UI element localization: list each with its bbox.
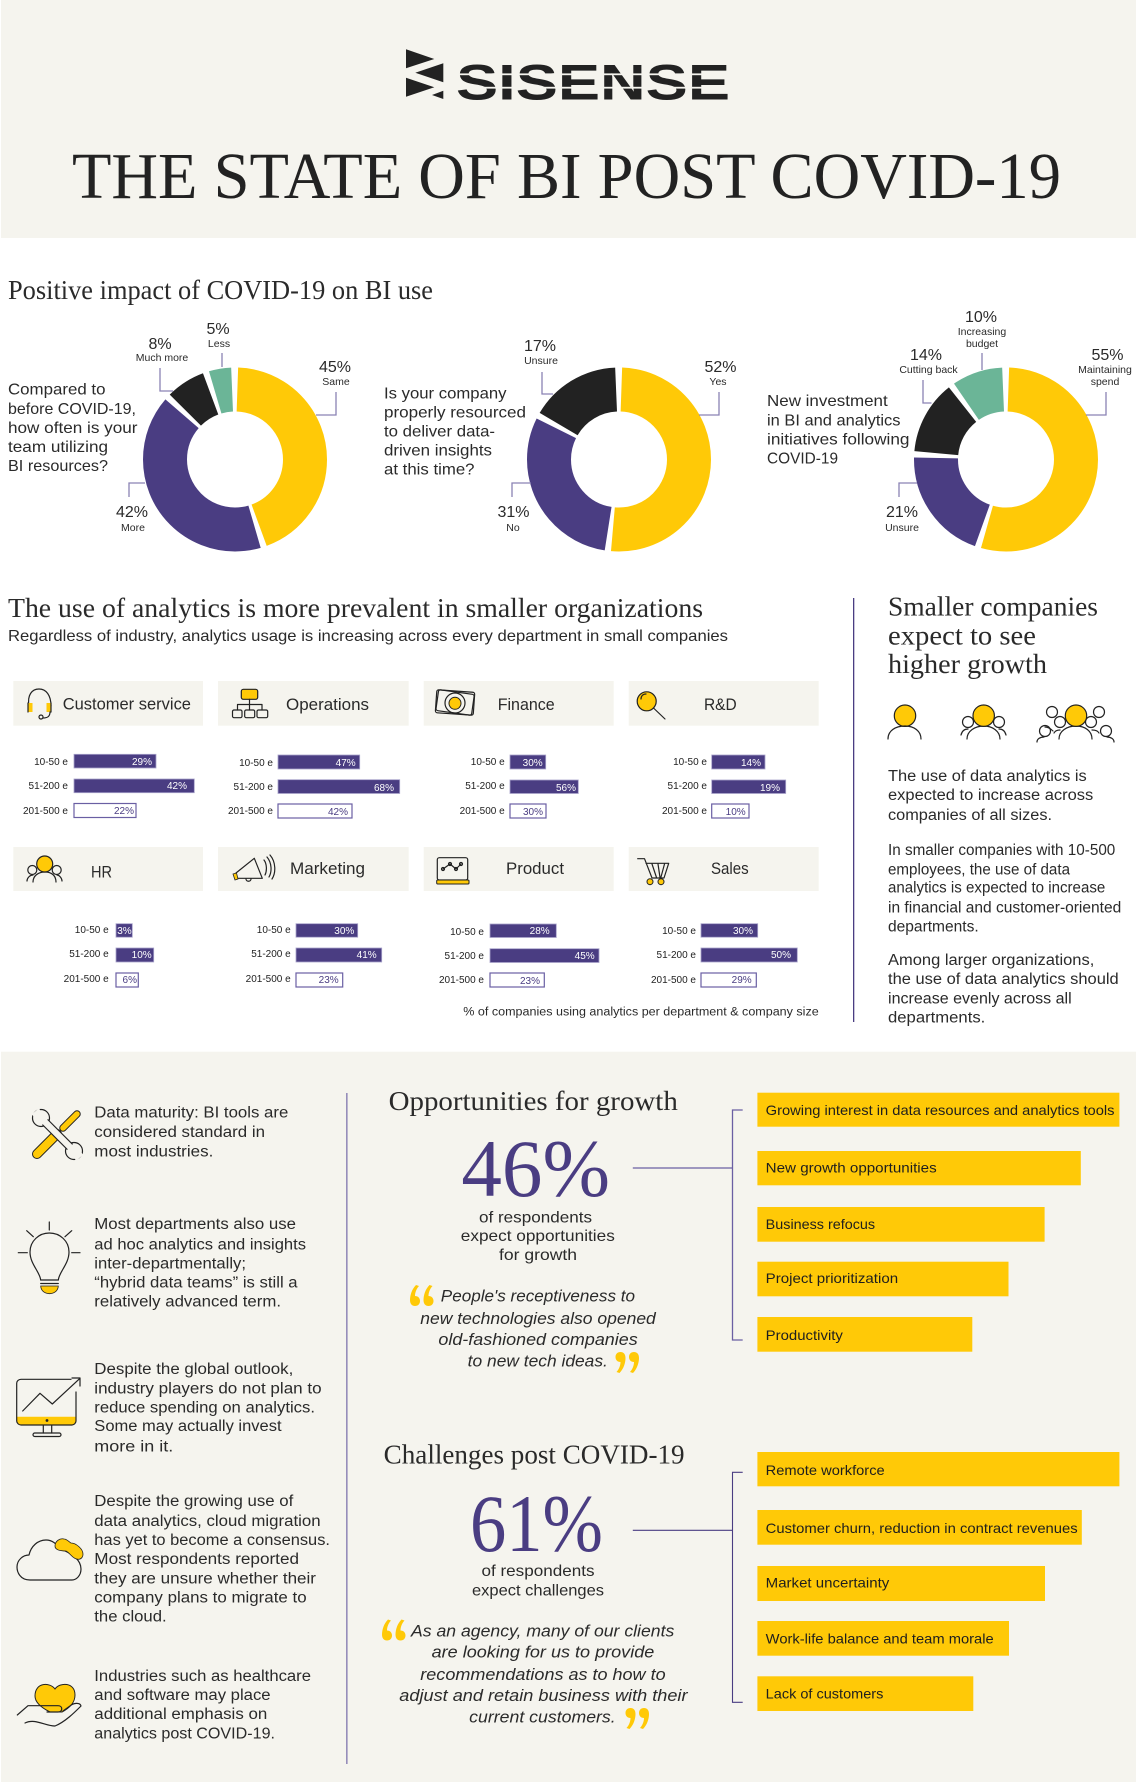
item: cloud migration: Despite the growing use of <box>94 1493 294 1510</box>
donut chart 1: More <box>121 522 145 534</box>
bar chart: marketing <box>246 924 382 987</box>
icon: cloud <box>17 1539 83 1580</box>
bar chart: product <box>439 924 599 987</box>
panel: donut 3 question: COVID-19 <box>767 450 838 468</box>
panel: smaller companies <box>888 592 1121 1027</box>
donut chart 2 <box>497 338 737 534</box>
bar chart: customer service <box>23 754 194 818</box>
bar chart: finance: 51-200 e <box>465 781 505 792</box>
panel: donut 1 question <box>8 382 138 475</box>
icon: laptop chart <box>437 858 469 884</box>
panel: donut 3 question: initiatives following <box>767 432 910 448</box>
donut chart 1: 8% <box>148 336 172 353</box>
bar chart: HR: 201-500 e <box>64 974 109 985</box>
icon: small team <box>961 705 1006 739</box>
bar chart: operations: 42% <box>328 807 348 818</box>
quote: current customers. <box>469 1708 616 1727</box>
bar chart: finance: 10-50 e <box>471 757 505 768</box>
title: THE STATE OF BI POST COVID-19 <box>72 140 1061 213</box>
item: healthcare and software <box>17 1668 311 1742</box>
panel: donut 3 question: New investment <box>767 393 888 410</box>
text: all sizes: companies of all sizes. <box>888 807 1052 824</box>
item: spending: industry players do not plan to <box>94 1380 322 1397</box>
panel: opportunities for growth <box>389 1086 1119 1373</box>
bar chart: operations: 68% <box>374 783 394 794</box>
item: ad hoc analytics: inter-departmentally; <box>94 1255 246 1272</box>
panel: HR <box>13 847 203 891</box>
panel: donut 2 question: at this time? <box>384 462 475 478</box>
item: spending: reduce spending on analytics. <box>94 1399 315 1416</box>
quote <box>410 1285 656 1373</box>
panel: challenges post COVID-19 <box>382 1439 1119 1729</box>
text: all sizes: expected to increase across <box>888 787 1094 804</box>
bar chart: customer service: 51-200 e <box>29 781 68 792</box>
connector bracket <box>633 1472 743 1702</box>
panel: donut 3 question: in BI and analytics <box>767 412 900 430</box>
panel: HR: HR <box>91 863 112 881</box>
icon: tools <box>32 1108 83 1161</box>
text: smaller companies: analytics is expected to increase <box>888 880 1105 897</box>
bar chart: product: 201-500 e <box>439 975 484 986</box>
item: healthcare and software: Industries such as healthcare <box>94 1668 311 1685</box>
donut chart 1: Less <box>208 338 230 350</box>
bar chart: R&D: 19% <box>760 783 780 794</box>
bar chart: finance: 56% <box>556 783 576 794</box>
logo: Sisense <box>406 49 734 110</box>
donut chart 2: No <box>506 522 520 534</box>
item: ad hoc analytics: Most departments also use <box>94 1216 296 1233</box>
item: data maturity <box>32 1104 288 1161</box>
ranked bars: opportunities <box>757 1093 1119 1352</box>
bar chart: customer service: 10-50 e <box>34 757 68 768</box>
icon: heart in hand <box>17 1684 81 1726</box>
panel: donut 1 question: before COVID-19, <box>8 401 136 418</box>
bar chart: marketing: 41% <box>357 950 377 961</box>
heading: smaller companies <box>888 592 1098 679</box>
bar chart: sales: 29% <box>732 975 752 986</box>
panel: donut 1 question: team utilizing <box>8 439 108 456</box>
lower panel background <box>1 1052 1136 1782</box>
icon: megaphone <box>233 855 275 881</box>
bar chart: HR: 10-50 e <box>75 925 109 936</box>
item: cloud migration <box>17 1493 330 1626</box>
icon: headset <box>28 689 51 719</box>
ranked bars: opportunities: Business refocus <box>766 1216 875 1232</box>
panel: R&D: R&D <box>704 696 737 714</box>
panel: finance: Finance <box>498 696 555 714</box>
panel: donut 1 question: how often is your <box>8 420 138 437</box>
quote: As an agency, many of our clients <box>410 1622 675 1641</box>
bar chart: operations: 51-200 e <box>234 782 273 793</box>
item: cloud migration: data analytics, cloud migration <box>94 1513 321 1530</box>
text: all sizes: The use of data analytics is <box>888 768 1087 785</box>
icon: light bulb <box>18 1222 80 1294</box>
panel: donut 2 question: to deliver data- <box>384 424 495 440</box>
panel: marketing <box>218 847 409 891</box>
panel: donut 2 question <box>384 385 526 478</box>
panel: operations <box>218 681 409 726</box>
item: cloud migration: the cloud. <box>94 1609 167 1626</box>
stat caption: for growth <box>499 1247 577 1264</box>
ranked bars: challenges: Remote workforce <box>766 1462 885 1478</box>
item: data maturity: considered standard in <box>94 1124 265 1141</box>
donut chart 3 <box>885 309 1132 534</box>
ranked bars: challenges: Work-life balance and team morale <box>766 1630 994 1646</box>
footnote: % of companies using analytics per department & company size <box>463 1007 819 1019</box>
bar chart: finance: 30% <box>523 807 543 818</box>
panel: customer service <box>13 681 203 726</box>
donut chart 1: 42% <box>116 504 148 521</box>
bar chart: HR: 6% <box>123 975 137 986</box>
bar chart: sales: 10-50 e <box>662 926 696 937</box>
panel: donut 2 question: Is your company <box>384 385 506 402</box>
ranked bars: opportunities: Productivity <box>766 1327 843 1343</box>
header panel <box>1 0 1136 238</box>
item: spending: Some may actually invest <box>94 1418 282 1435</box>
donut chart 3: Increasing <box>958 326 1006 338</box>
item: ad hoc analytics: “hybrid data teams” is still a <box>94 1274 298 1291</box>
bar chart: R&D: 201-500 e <box>662 806 707 817</box>
donut chart 3: Unsure <box>885 522 919 534</box>
stat: 46%: 46% <box>461 1123 610 1214</box>
donut chart 2: 31% <box>497 504 530 521</box>
bar chart: R&D <box>662 755 786 818</box>
quote: adjust and retain business with their <box>399 1686 689 1705</box>
item: spending: more in it. <box>94 1439 173 1456</box>
quote <box>382 1620 689 1729</box>
panel: sales <box>629 847 819 891</box>
donut chart 3: 21% <box>886 504 918 521</box>
stat caption <box>461 1209 615 1264</box>
item: ad hoc analytics <box>18 1216 306 1311</box>
ranked bars: opportunities: New growth opportunities <box>766 1160 937 1176</box>
icon: magnifier <box>637 692 665 719</box>
heading: opportunities: Opportunities for growth <box>389 1086 678 1116</box>
text: smaller companies: in financial and customer-oriented <box>888 900 1121 917</box>
bar chart: marketing: 51-200 e <box>251 949 291 960</box>
heading: smaller companies: Smaller companies <box>888 592 1098 622</box>
text: all sizes <box>888 768 1094 824</box>
text: larger organizations: Among larger organizations, <box>888 952 1094 969</box>
panel: donut 2 question: properly resourced <box>384 404 526 422</box>
bar chart: marketing: 30% <box>334 926 354 937</box>
panel: product <box>424 847 614 891</box>
quote: old-fashioned companies <box>438 1330 638 1349</box>
bar chart: operations <box>228 755 400 818</box>
bar chart: sales: 51-200 e <box>657 950 696 961</box>
panel: donut 1 question: Compared to <box>8 382 106 398</box>
panel: donut 3 question <box>767 393 910 468</box>
heading: positive impact: Positive impact of COVID-19 on BI use <box>8 275 433 305</box>
item: data maturity: Data maturity: BI tools are <box>94 1104 288 1121</box>
donut chart 1 <box>116 321 351 534</box>
bar chart: customer service: 42% <box>167 781 187 792</box>
bar chart: HR <box>64 924 154 987</box>
item: cloud migration: has yet to become a consensus. <box>94 1532 330 1549</box>
bar chart: marketing: 23% <box>319 975 339 986</box>
ranked bars: opportunities: Project prioritization <box>766 1270 898 1286</box>
item: cloud migration: they are unsure whether their <box>94 1570 316 1587</box>
quote: recommendations as to how to <box>420 1665 666 1684</box>
item: healthcare and software: analytics post COVID-19. <box>94 1725 275 1742</box>
item: spending: Despite the global outlook, <box>94 1361 293 1378</box>
donut chart 1: 45% <box>319 359 351 376</box>
icon: banknotes <box>435 690 475 715</box>
bar chart: operations: 10-50 e <box>239 758 273 769</box>
bar chart: customer service: 29% <box>132 757 152 768</box>
icon: large team <box>1037 705 1114 742</box>
text: smaller companies: In smaller companies with 10-500 <box>888 842 1116 859</box>
ranked bars: challenges: Lack of customers <box>766 1685 883 1701</box>
bar chart: HR: 3% <box>117 926 132 937</box>
connector bracket <box>633 1110 743 1340</box>
item: cloud migration: company plans to migrate to <box>94 1589 307 1606</box>
donut chart 2: 52% <box>704 359 737 376</box>
bar chart: product: 45% <box>575 951 595 962</box>
item: ad hoc analytics: relatively advanced term. <box>94 1294 281 1311</box>
bar chart: R&D: 10% <box>726 807 746 818</box>
text: smaller companies: employees, the use of data <box>888 861 1070 878</box>
stat caption <box>472 1563 604 1600</box>
quote: are looking for us to provide <box>432 1643 654 1662</box>
panel: R&D <box>629 681 819 726</box>
ranked bars: challenges: Customer churn, reduction in contract revenues <box>766 1520 1078 1536</box>
bar chart: finance <box>460 755 578 818</box>
text: larger organizations: the use of data analytics should <box>888 971 1119 988</box>
bar chart: product: 28% <box>530 926 550 937</box>
text: larger organizations: departments. <box>888 1010 985 1027</box>
bar chart: product: 23% <box>520 976 540 987</box>
bar chart: product: 10-50 e <box>450 927 484 938</box>
donut chart 1: Same <box>322 376 350 388</box>
bar chart: R&D: 10-50 e <box>673 757 707 768</box>
text: larger organizations <box>888 952 1119 1027</box>
item: cloud migration: Most respondents reported <box>94 1551 299 1568</box>
panel: product: Product <box>506 860 564 878</box>
bar chart: sales <box>651 924 797 987</box>
donut chart 1: Much more <box>136 352 188 364</box>
icon: monitor with chart <box>17 1378 80 1436</box>
stat caption: of respondents <box>479 1209 592 1226</box>
quote: to new tech ideas. <box>468 1352 608 1371</box>
ranked bars: challenges <box>757 1452 1119 1711</box>
panel: customer service: Customer service <box>63 695 191 713</box>
bar chart: HR: 51-200 e <box>69 949 109 960</box>
stat caption: of respondents <box>482 1563 594 1580</box>
bar chart: finance: 201-500 e <box>460 806 505 817</box>
bar chart: HR: 10% <box>132 950 152 961</box>
bar chart: marketing: 10-50 e <box>257 925 291 936</box>
bar chart: customer service: 22% <box>114 806 134 817</box>
bar chart: sales: 30% <box>733 926 753 937</box>
ranked bars: challenges: Market uncertainty <box>766 1574 889 1590</box>
donut chart 3: spend <box>1091 376 1119 388</box>
bar chart: R&D: 14% <box>741 758 761 769</box>
bar chart: sales: 201-500 e <box>651 975 696 986</box>
panel: donut 1 question: BI resources? <box>8 458 108 475</box>
bar chart: operations: 47% <box>336 758 356 769</box>
panel: donut 2 question: driven insights <box>384 442 492 460</box>
stat: 61%: 61% <box>470 1478 603 1569</box>
item: healthcare and software: and software may place <box>94 1687 271 1704</box>
panel: finance <box>424 681 614 726</box>
icon: one person <box>888 705 921 739</box>
text: smaller companies: departments. <box>888 919 979 936</box>
stat caption: expect opportunities <box>461 1228 615 1245</box>
bar chart: marketing: 201-500 e <box>246 974 291 985</box>
donut chart 2: Unsure <box>524 355 558 367</box>
bar chart: customer service: 201-500 e <box>23 806 68 817</box>
icon: people <box>27 856 62 882</box>
bar chart: operations: 201-500 e <box>228 806 273 817</box>
bar chart: R&D: 51-200 e <box>668 781 707 792</box>
donut chart 2: Yes <box>709 376 727 388</box>
heading: smaller companies: higher growth <box>888 649 1048 679</box>
bar chart: sales: 50% <box>771 950 791 961</box>
panel: operations: Operations <box>286 696 369 714</box>
donut chart 3: 55% <box>1091 347 1124 364</box>
stat caption: expect challenges <box>472 1583 604 1600</box>
text: larger organizations: increase evenly across all <box>888 990 1072 1007</box>
heading: challenges: Challenges post COVID-19 <box>384 1439 685 1469</box>
heading: analytics prevalence: The use of analytics is more prevalent in smaller organizations <box>8 593 703 623</box>
bar chart: finance: 30% <box>523 758 543 769</box>
subheading: Regardless of industry, analytics usage is increasing across every department in small companies <box>8 628 728 645</box>
item: data maturity: most industries. <box>94 1144 213 1161</box>
item: ad hoc analytics: ad hoc analytics and insights <box>94 1236 306 1253</box>
icon: org chart <box>232 689 268 718</box>
panel: sales: Sales <box>711 860 749 878</box>
heading: smaller companies: expect to see <box>888 620 1036 650</box>
item: healthcare and software: additional emphasis on <box>94 1706 267 1723</box>
donut chart 1: 5% <box>206 321 230 338</box>
donut chart 3: Maintaining <box>1078 364 1132 376</box>
quote: People's receptiveness to <box>441 1287 635 1306</box>
panel: marketing: Marketing <box>290 860 365 878</box>
ranked bars: opportunities: Growing interest in data resources and analytics tools <box>766 1102 1114 1118</box>
icon: cart <box>638 859 669 885</box>
donut chart 3: 14% <box>910 347 942 364</box>
donut chart 3: 10% <box>965 309 997 326</box>
logo: Sisense: SISENSE <box>456 54 730 110</box>
quote: new technologies also opened <box>420 1309 656 1328</box>
donut chart 3: Cutting back <box>899 364 958 376</box>
donut chart 3: budget <box>966 338 998 350</box>
donut chart 2: 17% <box>524 338 556 355</box>
bar chart: product: 51-200 e <box>445 951 484 962</box>
text: smaller companies <box>888 842 1121 936</box>
item: spending <box>17 1361 322 1456</box>
